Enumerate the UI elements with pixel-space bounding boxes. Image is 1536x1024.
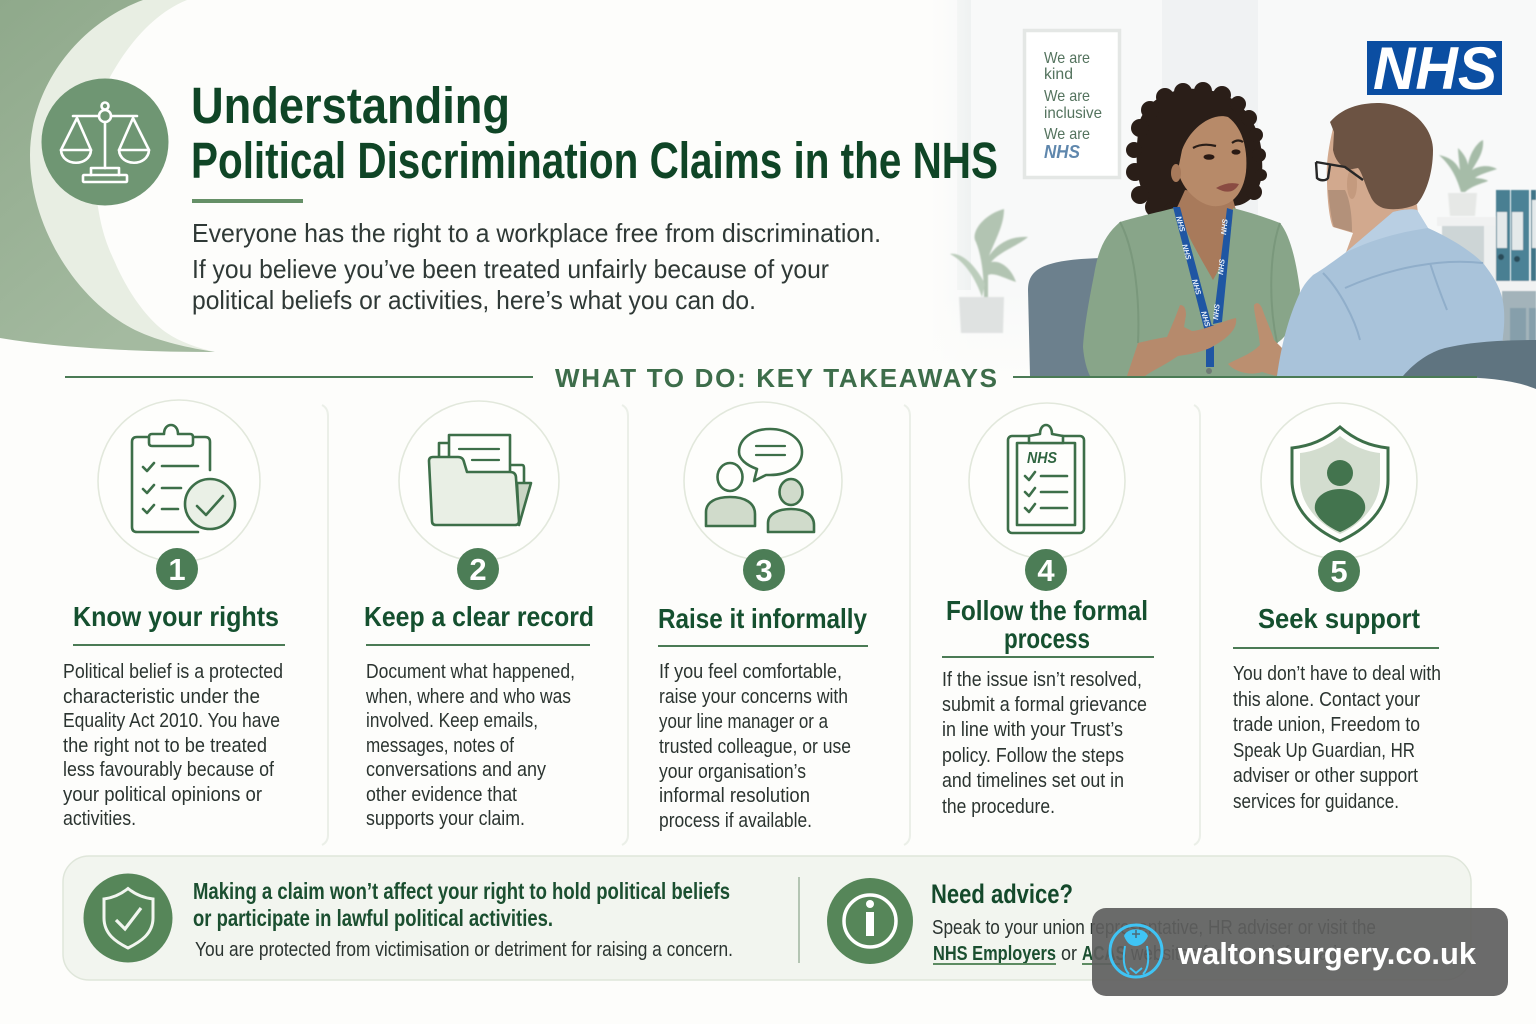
body text [1233, 663, 1441, 813]
body text: If the issue isn’t resolved, [942, 669, 1142, 691]
advice message: Need advice? [931, 879, 1073, 909]
body text [659, 661, 851, 832]
wall poster: inclusive [1044, 105, 1102, 122]
body text: the right not to be treated [63, 735, 267, 757]
blue lanyard: NHS [1174, 215, 1187, 233]
number badge 3 [743, 549, 785, 591]
number badge 5: 5 [1330, 554, 1348, 589]
icon: shield with check [84, 874, 172, 962]
body text: characteristic under the [63, 686, 260, 708]
woman's chair [1028, 258, 1100, 376]
icon: shield with person [1261, 403, 1417, 559]
body text: Equality Act 2010. You have [63, 710, 280, 732]
advice message: or [1061, 943, 1077, 965]
body text: conversations and any [366, 759, 546, 781]
body text: Speak Up Guardian, HR [1233, 740, 1415, 762]
body text: trusted colleague, or use [659, 736, 851, 758]
body text: in line with your Trust’s [942, 719, 1123, 741]
watermark: waltonsurgery.co.uk: waltonsurgery.co.uk [1177, 936, 1477, 971]
heading: Know your rights [73, 601, 279, 632]
step 3: raise it informally [658, 402, 868, 832]
body text: services for guidance. [1233, 791, 1399, 813]
decorative green crescent [0, 0, 215, 352]
body text: raise your concerns with [659, 686, 848, 708]
blue lanyard: NHS [1199, 310, 1212, 328]
blue lanyard: NHS [1211, 304, 1222, 320]
icon: NHS clipboard checklist [969, 403, 1125, 559]
icon: scales of justice [42, 78, 168, 206]
bottom panel: reassurance and advice [63, 856, 1471, 980]
heading: Keep a clear record [364, 601, 594, 632]
body text: other evidence that [366, 784, 517, 806]
body text: and timelines set out in [942, 770, 1124, 792]
wall poster [1024, 30, 1120, 178]
body text: Political belief is a protected [63, 661, 283, 683]
heading: Follow the formal [946, 595, 1148, 626]
wall poster: kind [1044, 66, 1073, 83]
body text: less favourably because of [63, 759, 274, 781]
step 2: keep a clear record [364, 401, 594, 830]
advice message: Speak to your union representative, HR adviser or visit the [932, 917, 1376, 939]
right shelf and binders [1437, 190, 1536, 342]
hair [1126, 82, 1267, 218]
green top [1083, 207, 1300, 376]
number badge 3: 3 [755, 553, 773, 588]
body text [63, 661, 283, 830]
step 4: follow the formal process [942, 403, 1154, 818]
intro text: Everyone has the right to a workplace free from discrimination. [192, 218, 881, 248]
number badge 4: 4 [1037, 553, 1055, 588]
number badge 2 [457, 548, 499, 590]
protection message [193, 878, 733, 961]
icon: information [827, 878, 913, 964]
right plant [1439, 140, 1497, 216]
advice message: websites for more information. [1130, 943, 1361, 965]
icon: NHS clipboard checklist: NHS [1027, 450, 1057, 467]
photo: two colleagues talking in an office [930, 0, 1536, 390]
title: Understanding [191, 77, 510, 134]
man [1277, 103, 1504, 376]
woman [1083, 82, 1300, 376]
body text: informal resolution [659, 785, 810, 807]
number badge 2: 2 [469, 552, 487, 587]
body text: involved. Keep emails, [366, 710, 538, 732]
man's chair [1403, 340, 1536, 390]
section heading: key takeaways [65, 363, 1536, 400]
body text: this alone. Contact your [1233, 689, 1420, 711]
neck and face [1327, 128, 1420, 255]
section heading: key takeaways: WHAT TO DO: KEY TAKEAWAYS [555, 363, 997, 393]
body text: policy. Follow the steps [942, 745, 1124, 767]
body text: adviser or other support [1233, 765, 1418, 787]
number badge 1 [156, 548, 198, 590]
intro text [192, 218, 881, 315]
NHS logo: NHS [1373, 35, 1497, 102]
office wall [930, 0, 1536, 376]
intro text: If you believe you’ve been treated unfairly because of your [192, 254, 829, 284]
icon: clipboard with check [98, 400, 260, 562]
icon: folder with documents [399, 401, 559, 561]
intro text: political beliefs or activities, here’s what you can do. [192, 285, 756, 315]
protection message: You are protected from victimisation or detriment for raising a concern. [195, 939, 733, 961]
body text: If you feel comfortable, [659, 661, 842, 683]
wall poster: We are [1044, 126, 1090, 143]
blue lanyard: NHS [1190, 278, 1203, 296]
blue lanyard: NHS [1216, 259, 1227, 275]
body text: when, where and who was [365, 686, 571, 708]
protection message: or participate in lawful political activities. [193, 905, 553, 931]
icon: nurse [1110, 925, 1162, 977]
left plant [950, 209, 1028, 333]
step 1: know your rights [63, 400, 285, 830]
body text: trade union, Freedom to [1233, 714, 1420, 736]
protection message: Making a claim won’t affect your right to hold political beliefs [193, 878, 730, 904]
heading: Raise it informally [658, 603, 867, 634]
body text: activities. [63, 808, 136, 830]
advice message [931, 879, 1376, 965]
watermark: waltonsurgery.co.uk [1092, 908, 1508, 996]
body text: messages, notes of [366, 735, 514, 757]
body text: Document what happened, [366, 661, 575, 683]
title: Political Discrimination Claims in the NHS [191, 132, 998, 189]
icon: two people talking [684, 402, 842, 560]
title [191, 77, 998, 189]
body text: the procedure. [942, 796, 1055, 818]
hands [1127, 305, 1236, 376]
face [1178, 116, 1246, 206]
ear [1347, 169, 1357, 199]
body text: your political opinions or [63, 784, 262, 806]
blue lanyard: NHS [1219, 219, 1230, 235]
body text [365, 661, 575, 830]
number badge 5 [1318, 550, 1360, 592]
body text: process if available. [659, 810, 812, 832]
body text [942, 669, 1147, 818]
body text: your organisation’s [659, 761, 806, 783]
blue shirt [1277, 209, 1504, 376]
heading: Seek support [1258, 603, 1420, 634]
blue lanyard: NHS [1180, 243, 1193, 261]
number badge 1: 1 [168, 552, 186, 587]
wall poster: NHS [1044, 142, 1080, 162]
body text: submit a formal grievance [942, 694, 1147, 716]
body text: your line manager or a [659, 711, 829, 733]
hair [1330, 103, 1433, 209]
wall poster: We are [1044, 88, 1090, 105]
body text: You don’t have to deal with [1233, 663, 1441, 685]
blue lanyard [1173, 207, 1233, 374]
title underline [192, 199, 303, 203]
neck and chest [1175, 190, 1236, 285]
advice message: ACAS [1082, 943, 1126, 965]
body text: supports your claim. [366, 808, 525, 830]
advice message: NHS Employers [933, 943, 1056, 965]
heading [946, 595, 1148, 654]
step 5: seek support [1233, 403, 1441, 813]
number badge 4 [1025, 549, 1067, 591]
glasses [1316, 162, 1363, 180]
heading: process [1004, 623, 1090, 654]
wall poster: We are [1044, 50, 1090, 67]
